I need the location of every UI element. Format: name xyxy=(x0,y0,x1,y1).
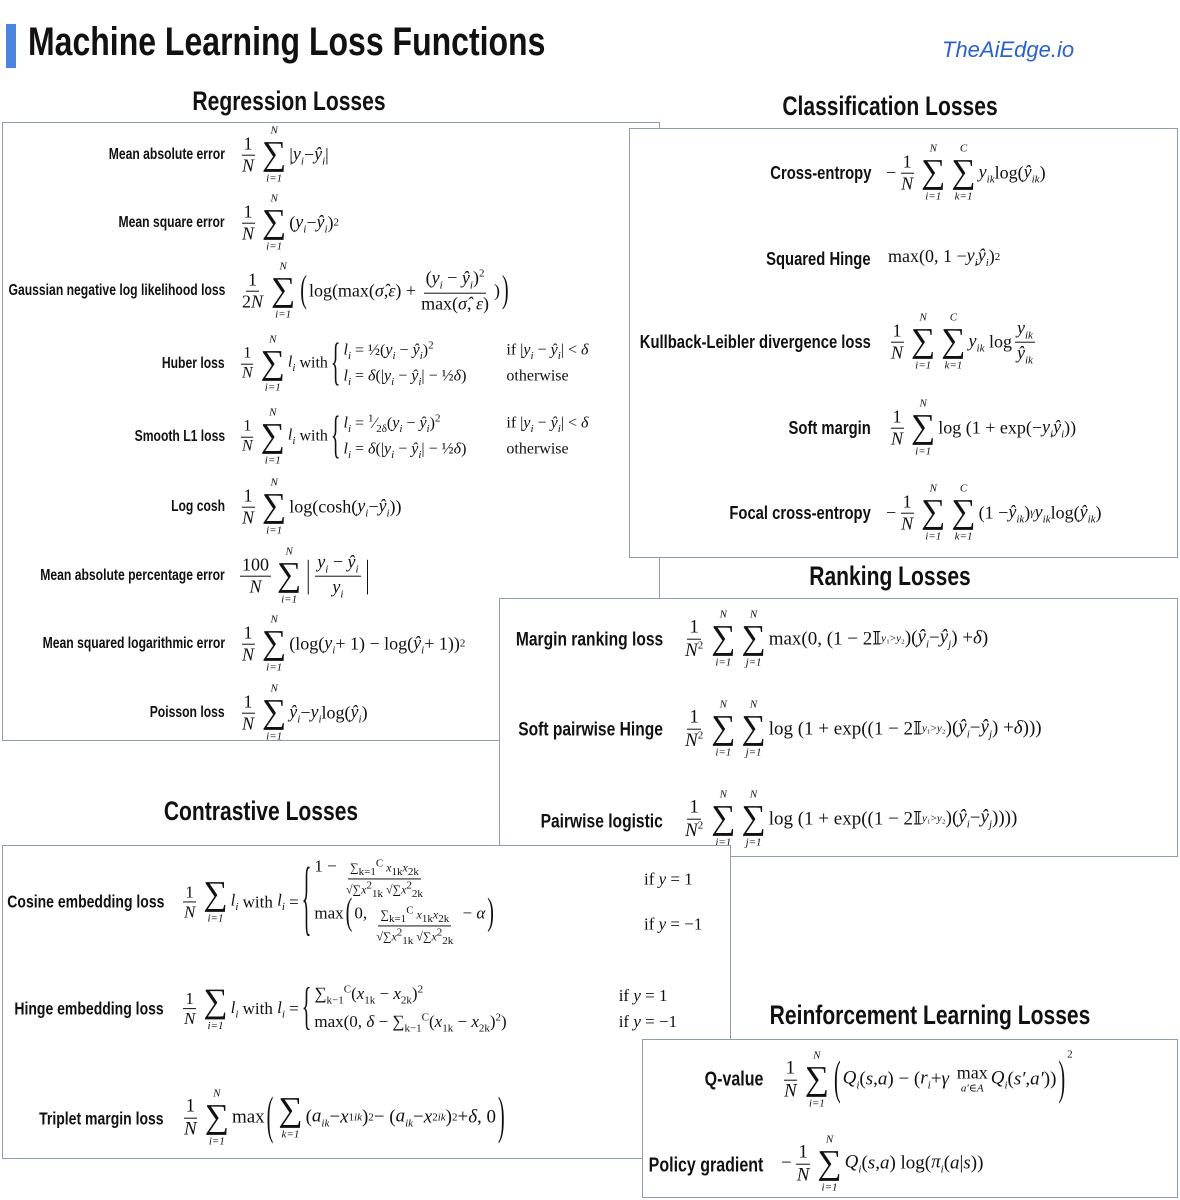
panel: regression: li = δ(|yi − ŷi| − ½δ) xyxy=(344,441,466,461)
panel: reinforcement learning: s xyxy=(868,1153,875,1174)
panel: classification: i=1 xyxy=(925,191,941,203)
panel: contrastive: if y = −1 xyxy=(619,1012,677,1031)
panel: contrastive: { xyxy=(302,854,311,946)
panel: contrastive: N xyxy=(184,902,195,922)
panel: regression: N xyxy=(270,614,278,626)
panel: ranking: 1 xyxy=(689,706,699,727)
panel: ranking: N xyxy=(750,699,757,711)
panel: contrastive: 2ik xyxy=(432,1112,446,1124)
panel: contrastive: 1 xyxy=(185,989,194,1008)
panel: regression: 1 xyxy=(248,270,257,290)
panel: ranking: N xyxy=(720,699,727,711)
panel: ranking: i=1 xyxy=(715,657,731,669)
panel: classification: ∑ xyxy=(951,154,976,191)
panel: regression: N xyxy=(270,193,278,205)
panel: regression: ∑ xyxy=(262,204,286,241)
panel: regression: N xyxy=(242,224,254,244)
panel: contrastive: li xyxy=(231,891,238,913)
squared hinge: Squared Hinge xyxy=(767,248,871,269)
panel: contrastive: ∑ xyxy=(203,876,228,913)
panel: regression: N xyxy=(242,438,253,454)
panel: classification: γ xyxy=(1030,507,1035,519)
panel: contrastive: i=1 xyxy=(209,1136,225,1148)
panel: contrastive: if y = 1 xyxy=(619,986,667,1006)
panel: regression: { xyxy=(331,334,340,391)
panel: contrastive: ∑ xyxy=(203,983,228,1020)
panel: contrastive: N xyxy=(213,1088,220,1100)
panel: ranking: ŷj xyxy=(980,807,992,831)
panel: regression: 2N xyxy=(242,292,263,312)
mae: 1 xyxy=(244,134,252,154)
gaussian nll: Gaussian negative log likelihood loss xyxy=(8,282,225,299)
panel: classification: ŷik xyxy=(1008,501,1024,525)
mae: Mean absolute error xyxy=(109,146,225,163)
panel: classification: max(0, 1 − ) xyxy=(888,246,995,266)
panel: contrastive: ∑ xyxy=(278,1092,303,1129)
kl: Kullback-Leibler divergence loss xyxy=(640,331,871,352)
panel: ranking: 1 xyxy=(689,616,699,637)
smooth l1: Smooth L1 loss xyxy=(134,428,225,445)
panel: reinforcement learning: s xyxy=(866,1069,873,1090)
panel: regression: 2 xyxy=(334,217,339,229)
panel: reinforcement learning: ∑ xyxy=(805,1061,829,1098)
panel: ranking: N2 xyxy=(685,819,703,841)
panel: classification: ŷik xyxy=(1017,342,1033,366)
panel: classification: i=1 xyxy=(925,531,941,543)
panel: regression: ŷi xyxy=(351,701,362,725)
panel: regression: ε xyxy=(388,280,395,300)
panel: regression xyxy=(2,122,660,741)
panel: ranking: ŷi xyxy=(918,627,929,651)
panel: ranking: i=1 xyxy=(715,837,731,849)
panel: reinforcement learning: 1 xyxy=(798,1142,808,1163)
panel: contrastive: if y = −1 xyxy=(644,914,702,933)
panel: ranking: N2 xyxy=(685,639,703,661)
panel: regression: yi xyxy=(332,576,343,600)
panel: regression: i=1 xyxy=(265,455,281,467)
panel: regression: if |yi − ŷi| < δ xyxy=(506,342,588,362)
panel: regression: i=1 xyxy=(266,241,282,253)
panel: ranking: ŷi xyxy=(958,717,970,741)
panel: regression: ∑ xyxy=(277,557,301,594)
margin ranking: Margin ranking loss xyxy=(516,628,663,650)
panel: contrastive: with = xyxy=(243,999,299,1018)
panel: classification: ∑ xyxy=(911,323,935,360)
panel: contrastive: ∑k=1C x1kx2k xyxy=(380,904,449,925)
panel: regression: ŷi xyxy=(289,701,300,725)
panel: classification: − log( ) xyxy=(886,162,1046,182)
panel: contrastive: ∑k=1C x1kx2k xyxy=(350,857,419,878)
panel: reinforcement learning: a′ xyxy=(1030,1069,1044,1090)
panel: regression: N xyxy=(270,477,278,489)
panel: reinforcement learning: N xyxy=(784,1080,797,1102)
panel: regression: li = δ(|yi − ŷi| − ½δ) xyxy=(344,368,466,388)
panel: regression: | xyxy=(306,554,310,596)
panel: regression: (log( + 1) − log( + 1)) xyxy=(289,634,460,654)
panel: regression: otherwise xyxy=(506,441,569,458)
panel: regression: 1 xyxy=(244,202,252,222)
panel: regression: N xyxy=(249,576,262,596)
panel: reinforcement learning: max xyxy=(957,1063,988,1083)
panel: reinforcement learning: i=1 xyxy=(822,1182,838,1194)
panel: contrastive: ( xyxy=(346,892,352,933)
panel: ranking: ∑ xyxy=(711,710,735,747)
panel: regression: li = 1⁄2δ(yi − ŷi)2 xyxy=(344,413,440,435)
panel: ranking: N2 xyxy=(685,729,703,751)
panel: regression: i=1 xyxy=(265,382,281,394)
panel: regression: yi xyxy=(357,495,368,519)
soft pairwise hinge: Soft pairwise Hinge xyxy=(518,718,663,740)
panel: classification: ∑ xyxy=(941,323,966,360)
panel: contrastive: max(0, δ − ∑k−1C(x1k − x2k)2) xyxy=(314,1011,507,1034)
panel: contrastive: ) xyxy=(487,892,494,933)
triplet margin: Triplet margin loss xyxy=(40,1108,164,1128)
panel: classification: N xyxy=(901,174,913,194)
panel: regression: 2 xyxy=(460,638,465,650)
panel: regression: yi xyxy=(310,701,322,725)
panel: regression: | xyxy=(366,554,370,596)
panel: regression: li xyxy=(288,354,295,374)
panel: ranking: N xyxy=(720,789,727,801)
panel: ranking: i=1 xyxy=(715,747,731,759)
panel: regression: N xyxy=(285,546,293,558)
panel: contrastive: √∑x21k √∑x22k xyxy=(376,927,453,947)
mae: ŷi xyxy=(314,143,325,167)
panel: contrastive: 1 xyxy=(186,1096,195,1117)
mae: | − | xyxy=(289,144,329,164)
panel: classification: N xyxy=(919,312,927,324)
panel: regression: ∑ xyxy=(262,488,286,525)
panel: reinforcement learning: ri xyxy=(920,1068,931,1092)
panel: contrastive: li xyxy=(277,998,285,1020)
panel: ranking: 1 xyxy=(689,796,699,817)
mae: ∑ xyxy=(262,136,286,173)
panel: contrastive: 1 xyxy=(185,882,194,901)
heading: ranking: Ranking Losses xyxy=(809,561,971,591)
mae: N xyxy=(242,156,254,176)
panel: contrastive: k=1 xyxy=(282,1129,299,1141)
panel: regression: yi xyxy=(324,632,335,656)
panel: regression: ) xyxy=(502,269,509,311)
panel: contrastive: N xyxy=(184,1118,197,1140)
panel: ranking: N xyxy=(750,789,757,801)
panel: ranking: δ xyxy=(1014,718,1023,739)
panel: regression: N xyxy=(242,508,254,528)
panel: classification: yik xyxy=(979,161,995,185)
panel: reinforcement learning: a xyxy=(878,1069,887,1090)
panel: regression: 1 xyxy=(244,692,252,712)
panel: contrastive: x xyxy=(340,1107,349,1128)
panel: classification: C xyxy=(960,483,967,495)
panel: regression: log(cosh( − )) xyxy=(289,496,402,516)
panel: contrastive xyxy=(2,845,731,1159)
panel: regression: (yi − ŷi)2 xyxy=(426,268,484,292)
cosine embedding: Cosine embedding loss xyxy=(7,892,164,912)
panel: regression: li = ½(yi − ŷi)2 xyxy=(344,340,434,362)
panel: regression: 1 xyxy=(244,486,252,506)
panel: regression: li xyxy=(288,427,295,447)
panel: contrastive: if y = 1 xyxy=(644,870,693,889)
panel: regression: 100 xyxy=(242,555,269,575)
heading: regression: Regression Losses xyxy=(192,86,386,116)
panel: regression: with xyxy=(299,355,328,372)
panel: classification: ŷik xyxy=(1024,161,1040,185)
panel: contrastive: i=1 xyxy=(207,913,223,925)
panel: ranking: y₁>y₂ xyxy=(922,723,946,735)
panel: regression: N xyxy=(242,364,253,382)
panel: contrastive: 1 − xyxy=(314,856,337,875)
panel: regression: 1 xyxy=(244,623,252,643)
panel: ranking: ŷj xyxy=(940,627,951,651)
panel: reinforcement learning: ( xyxy=(834,1052,841,1105)
panel: classification: log xyxy=(989,332,1012,352)
panel: classification: i=1 xyxy=(915,446,931,458)
panel: ranking: ŷj xyxy=(980,717,992,741)
panel: classification: yiŷi xyxy=(1042,416,1064,440)
panel: classification: ∑ xyxy=(951,494,976,531)
panel: classification: 1 xyxy=(892,321,902,341)
panel: ranking: ∑ xyxy=(741,710,766,747)
panel: contrastive: ) xyxy=(498,1088,505,1145)
panel: classification: ∑ xyxy=(911,409,935,446)
panel: classification: N xyxy=(930,483,937,495)
policy gradient: Policy gradient xyxy=(648,1154,763,1176)
panel: ranking: log (1 + exp((1 − 2𝕀 )( − ) + ))) xyxy=(769,718,1042,740)
panel: classification: yik xyxy=(969,330,984,354)
panel: classification: C xyxy=(950,312,957,324)
panel: reinforcement learning: 2 xyxy=(1067,1049,1073,1061)
msle: Mean squared logarithmic error xyxy=(43,635,225,652)
panel: contrastive: max ( − ) − ( − ) + , 0 xyxy=(232,1107,496,1128)
panel: contrastive: aik xyxy=(312,1106,329,1130)
panel: classification: ŷik xyxy=(1080,501,1096,525)
panel: contrastive: { xyxy=(302,979,311,1036)
panel: regression: 1 xyxy=(243,418,251,435)
panel: classification: yik xyxy=(1017,317,1033,341)
panel: contrastive: aik xyxy=(396,1106,413,1130)
heading: reinforcement learning: Reinforcement Learning Losses xyxy=(770,1000,1090,1030)
panel: reinforcement learning: i=1 xyxy=(809,1098,825,1110)
panel: regression: N xyxy=(242,714,254,734)
focal: Focal cross-entropy xyxy=(730,502,871,523)
panel: reinforcement learning: Qi xyxy=(991,1068,1008,1092)
panel: reinforcement learning: γ xyxy=(941,1069,949,1090)
mape: Mean absolute percentage error xyxy=(41,567,225,584)
mae: yi xyxy=(293,143,304,167)
panel: reinforcement learning xyxy=(642,1039,1178,1198)
heading: classification: Classification Losses xyxy=(782,91,998,121)
panel: reinforcement learning: ∑ xyxy=(817,1145,842,1182)
panel: ranking: log (1 + exp((1 − 2𝕀 )( − )))) xyxy=(769,808,1017,830)
panel: contrastive: ∑ xyxy=(205,1099,229,1136)
panel: classification: − (1 − ) log( ) xyxy=(886,502,1102,522)
panel: regression: i=1 xyxy=(266,525,282,537)
panel: contrastive: √∑x21k √∑x22k xyxy=(346,879,423,900)
panel: regression: ŷi xyxy=(378,495,390,519)
panel: reinforcement learning: ( , ) − ( + ( , )) xyxy=(859,1069,1056,1090)
panel: ranking: j=1 xyxy=(746,657,762,669)
panel: regression: 1 xyxy=(243,345,251,362)
panel: contrastive: δ xyxy=(468,1107,477,1128)
panel: reinforcement learning: Qi xyxy=(843,1068,859,1092)
q-value: Q-value xyxy=(704,1068,763,1090)
panel: ranking xyxy=(499,598,1178,857)
poisson: Poisson loss xyxy=(150,704,225,721)
panel: contrastive: N xyxy=(184,1010,195,1028)
panel: regression: i=1 xyxy=(266,662,282,674)
mae: i=1 xyxy=(266,173,282,185)
panel: classification: N xyxy=(930,143,937,155)
mae: N xyxy=(270,125,278,137)
panel: ranking: max(0, (1 − 2𝕀 )( − ) + ) xyxy=(769,628,988,650)
panel: regression: ŷi xyxy=(413,632,424,656)
panel: classification: 2 xyxy=(995,251,1000,263)
panel: contrastive: li xyxy=(277,891,285,913)
panel: classification: N xyxy=(891,428,903,448)
panel: classification: ∑ xyxy=(921,494,945,531)
panel: regression: N xyxy=(270,683,278,695)
panel: ranking: ŷi xyxy=(958,807,970,831)
panel: regression: yi − ŷi xyxy=(317,551,359,575)
panel: ranking: j=1 xyxy=(746,837,762,849)
panel: classification: 1 xyxy=(903,492,912,512)
panel: contrastive: 2 xyxy=(452,1112,457,1124)
brand: TheAiEdge.io xyxy=(942,37,1074,62)
panel: ranking: ∑ xyxy=(711,620,735,657)
panel: contrastive: i=1 xyxy=(207,1020,223,1032)
panel: classification xyxy=(629,128,1178,558)
panel: reinforcement learning: ) xyxy=(1058,1052,1065,1105)
panel: regression: ∑ xyxy=(262,625,286,662)
panel: regression: N xyxy=(242,644,254,664)
panel: classification: 1 xyxy=(892,407,902,427)
panel: contrastive: with = xyxy=(243,892,299,911)
panel: regression: with xyxy=(299,428,328,445)
panel: reinforcement learning: − ( , ) log( ( | )) xyxy=(781,1153,983,1174)
panel: reinforcement learning: Qi xyxy=(845,1152,861,1176)
title: Machine Learning Loss Functions xyxy=(28,20,545,64)
panel: regression: N xyxy=(269,407,276,419)
panel: contrastive: 1ik xyxy=(349,1112,362,1124)
panel: classification: N xyxy=(891,342,903,362)
panel: reinforcement learning: πi xyxy=(931,1152,944,1176)
panel: regression: ∑ xyxy=(261,418,285,455)
hinge embedding: Hinge embedding loss xyxy=(15,998,164,1018)
panel: classification: yiŷi xyxy=(967,245,989,269)
panel: ranking: j=1 xyxy=(746,747,762,759)
panel: regression: if |yi − ŷi| < δ xyxy=(506,415,588,435)
panel: regression: ( − ) xyxy=(289,212,334,232)
pairwise logistic: Pairwise logistic xyxy=(541,810,663,832)
panel: classification: ∑ xyxy=(921,154,945,191)
heading: contrastive: Contrastive Losses xyxy=(164,796,358,826)
panel: classification: log (1 + exp(− )) xyxy=(938,418,1076,438)
panel: ranking: y₁>y₂ xyxy=(922,813,946,825)
panel: reinforcement learning: s′ xyxy=(1014,1069,1025,1090)
panel: contrastive: ( xyxy=(267,1088,273,1145)
panel: regression: N xyxy=(279,261,287,273)
panel: ranking: δ xyxy=(973,628,982,649)
panel: reinforcement learning: a xyxy=(950,1153,960,1174)
panel: contrastive: 2 xyxy=(368,1112,374,1124)
soft margin: Soft margin xyxy=(789,417,871,438)
mae xyxy=(109,125,329,185)
panel: regression: ∑ xyxy=(271,272,295,309)
panel: regression: − log( ) xyxy=(300,702,368,722)
panel: reinforcement learning: s xyxy=(963,1153,971,1174)
panel: ranking: N xyxy=(750,609,757,621)
panel: regression: yi xyxy=(295,211,306,235)
panel: reinforcement learning: 1 xyxy=(786,1058,795,1079)
title accent bar xyxy=(6,24,16,68)
panel: regression: i=1 xyxy=(266,731,282,743)
mse: Mean square error xyxy=(119,214,225,231)
panel: reinforcement learning: a′∈A xyxy=(961,1083,984,1095)
panel: classification: N xyxy=(919,398,927,410)
panel: regression: { xyxy=(331,407,340,464)
panel: ranking: ∑ xyxy=(741,800,766,837)
panel: reinforcement learning: N xyxy=(813,1050,820,1062)
panel: regression: i=1 xyxy=(281,594,297,606)
panel: regression: σ̂ xyxy=(375,280,384,300)
panel: regression: log(max( , ) + ) xyxy=(309,280,500,300)
panel: contrastive: max 0, − α xyxy=(314,904,485,922)
panel: contrastive: ∑k−1C(x1k − x2k)2 xyxy=(314,983,423,1006)
panel: contrastive: x xyxy=(424,1107,432,1128)
panel: regression: max(σ̂, ε) xyxy=(421,293,489,313)
panel: classification: k=1 xyxy=(944,360,962,372)
panel: classification: 1 xyxy=(903,152,912,172)
panel: ranking: N xyxy=(720,609,727,621)
panel: regression: N xyxy=(269,334,276,346)
log cosh: Log cosh xyxy=(171,498,225,515)
panel: regression: ŷi xyxy=(316,211,328,235)
panel: regression: ( xyxy=(300,269,307,311)
panel: regression: ∑ xyxy=(261,345,285,382)
panel: regression: ∑ xyxy=(262,694,286,731)
panel: reinforcement learning: a xyxy=(880,1153,889,1174)
panel: classification: yik xyxy=(1035,501,1051,525)
panel: classification: C xyxy=(960,143,967,155)
huber: Huber loss xyxy=(162,355,225,372)
panel: regression: i=1 xyxy=(275,309,291,321)
panel: classification: k=1 xyxy=(955,191,972,203)
panel: reinforcement learning: N xyxy=(826,1134,833,1146)
panel: classification: i=1 xyxy=(915,360,931,372)
panel: reinforcement learning: N xyxy=(797,1164,809,1186)
panel: ranking: ∑ xyxy=(741,620,766,657)
panel: regression: otherwise xyxy=(506,368,569,385)
panel: classification: N xyxy=(901,514,913,534)
panel: classification: k=1 xyxy=(955,531,972,543)
panel: contrastive: li xyxy=(231,998,238,1020)
cross entropy: Cross-entropy xyxy=(770,162,871,183)
panel: ranking: ∑ xyxy=(711,800,735,837)
panel: ranking: y₁>y₂ xyxy=(881,633,905,645)
